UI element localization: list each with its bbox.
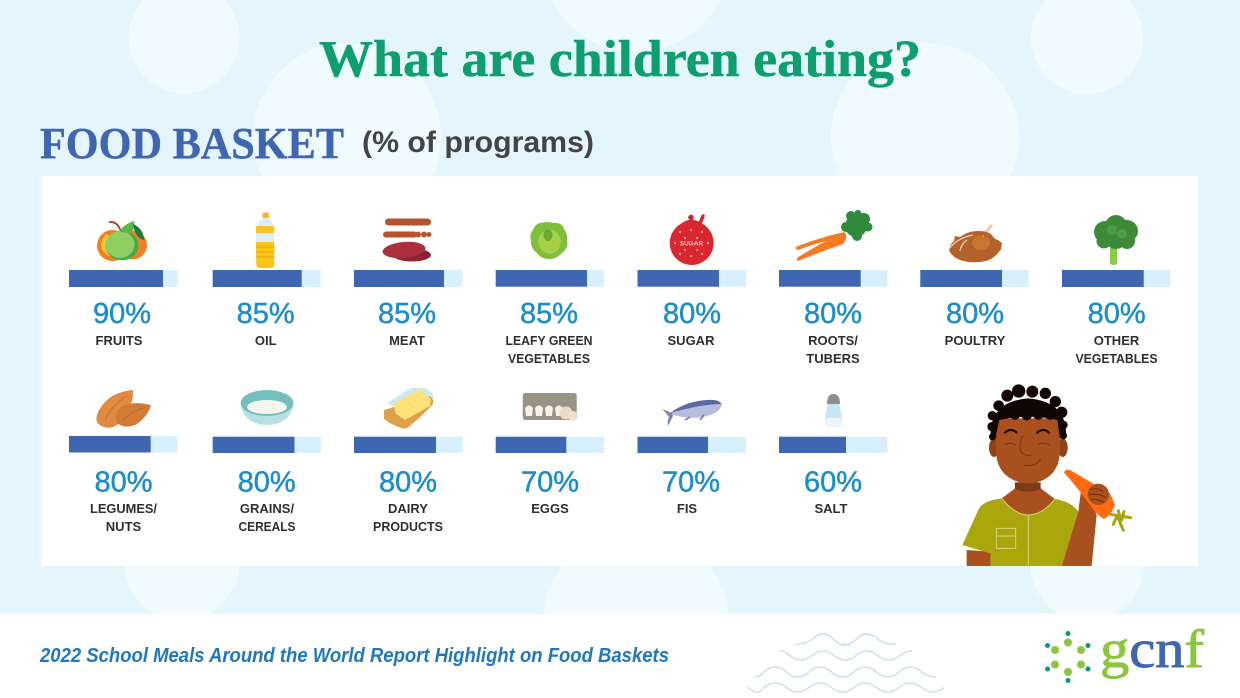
labels: ROOTS/ [808,333,858,348]
icon: bowl of grains [241,390,293,425]
labels [806,333,860,366]
icon: roast chicken [949,226,1002,262]
item: roots and tubers 80% [779,210,888,366]
icon: salt shaker [825,394,842,427]
progress bar [496,437,604,453]
icon: lettuce [530,222,567,259]
labels: TUBERS [806,351,860,366]
labels: LEAFY GREEN [506,333,592,348]
labels: CEREALS [238,519,296,534]
item: eggs 70% [496,393,604,516]
item: fish 70% [638,400,746,516]
icon: almonds [96,390,151,428]
label: FRUITS [96,333,143,348]
logo: gcnf [1045,619,1204,683]
label: EGGS [531,501,569,516]
progress bar [638,437,746,453]
item: poultry 80% [920,226,1029,348]
icon: butter [384,388,433,429]
labels: VEGETABLES [1076,351,1158,366]
labels: PRODUCTS [373,519,443,534]
value: 80% [804,298,862,330]
icon: oil bottle [256,212,274,268]
value: 80% [946,298,1004,330]
labels: NUTS [106,519,142,534]
value: 70% [521,466,579,498]
item: salt 60% [779,394,888,516]
icon: egg carton [523,393,578,421]
labels [1076,333,1158,366]
progress bar [354,437,462,453]
label: OIL [255,333,277,348]
icon: carrot [796,210,872,261]
title: What are children eating? [319,31,921,88]
icon: fruits [97,221,147,261]
item: grains and cereals 80% [213,390,321,534]
value: 85% [237,298,295,330]
item: other vegetables 80% [1062,215,1170,366]
labels [373,501,443,534]
item: oil 85% [213,212,321,348]
icon: sugar bowl: SUGAR [680,240,704,248]
progress bar [779,437,888,453]
item: fruits 90% [69,221,178,348]
value: 85% [378,298,436,330]
label: SUGAR [668,333,715,348]
labels: GRAINS/ [240,501,294,516]
labels [506,333,592,366]
icon: broccoli [1094,215,1138,265]
value: 60% [804,466,862,498]
value: 80% [238,466,296,498]
value: 90% [93,298,151,330]
value: 70% [662,466,720,498]
label: SALT [815,501,848,516]
item: meat 85% [354,218,462,348]
progress bar [213,437,321,453]
progress bar [779,270,888,287]
footer note: 2022 School Meals Around the World Report Highlight on Food Baskets [39,645,669,667]
labels: LEGUMES/ [90,501,157,516]
footer band [0,614,1240,698]
progress bar [638,270,746,287]
item: legumes and nuts 80% [69,390,178,534]
progress bar [920,270,1029,287]
labels: DAIRY [388,501,428,516]
panel: food basket chart [42,176,1198,566]
labels: OTHER [1094,333,1140,348]
progress bar [69,270,178,287]
value: 80% [379,466,437,498]
label: FIS [677,501,697,516]
value: 85% [520,298,578,330]
labels [238,501,296,534]
decorative waves [748,634,944,692]
progress bar [213,270,321,287]
labels [90,501,157,534]
label: MEAT [389,333,425,348]
value: 80% [663,298,721,330]
progress bar [354,270,462,287]
item: sugar 80% [638,215,746,348]
progress bar [496,270,604,287]
icon: tuna fish [662,400,722,426]
illustration: boy eating carrot [962,384,1131,566]
subheading: percent of programs: (% of programs) [362,126,594,159]
item: leafy green vegetables 85% [496,222,604,366]
label: POULTRY [945,333,1006,348]
value: 80% [1088,298,1146,330]
progress bar [1062,270,1170,287]
logo wordmark: gcnf [1100,619,1204,679]
logo mark: dots [1045,631,1090,683]
icon: meat [382,218,432,262]
value: 80% [94,466,153,498]
labels: VEGETABLES [508,351,590,366]
progress bar [69,436,178,452]
item: dairy products 80% [354,388,462,534]
heading: food basket: FOOD BASKET [40,119,344,168]
